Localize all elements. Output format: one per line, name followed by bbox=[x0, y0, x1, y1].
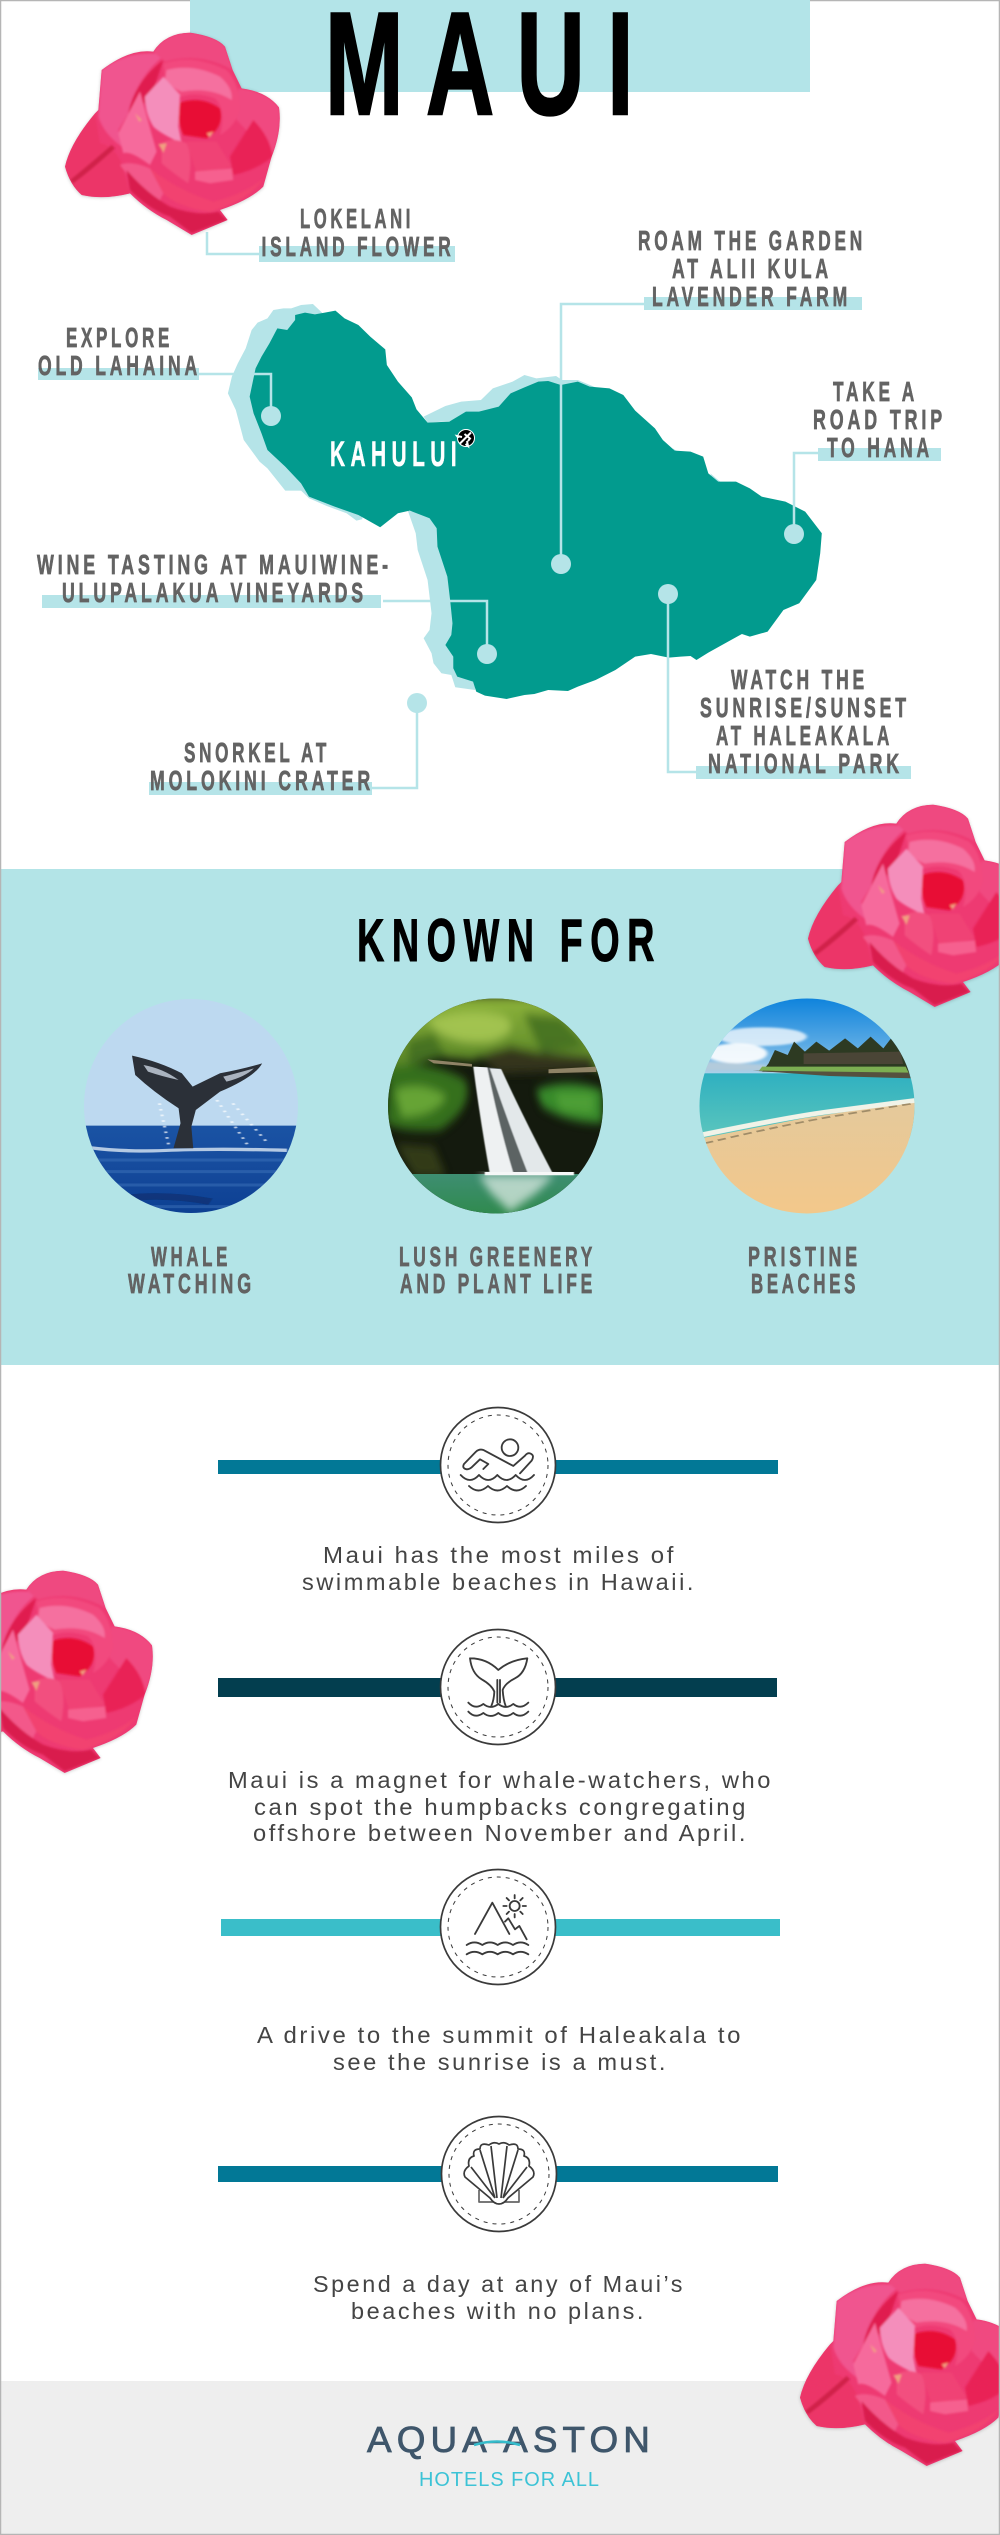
label: Lokelani Island Flower bbox=[259, 203, 455, 262]
tagline: HOTELS FOR ALL bbox=[419, 2468, 600, 2491]
label: Alii Kula Lavender Farm bbox=[638, 225, 866, 312]
caption: whale watching: WATCHING bbox=[128, 1268, 255, 1299]
label: Alii Kula Lavender Farm: ROAM THE GARDEN bbox=[638, 225, 866, 256]
bar bbox=[221, 1919, 780, 1936]
label: Road trip to Hana bbox=[813, 376, 946, 463]
bar bbox=[218, 2166, 778, 2182]
label: Haleakala bbox=[696, 664, 911, 779]
photo: waterfall bbox=[383, 997, 612, 1217]
caption: lush greenery bbox=[399, 1241, 596, 1299]
caption: lush greenery: LUSH GREENERY bbox=[399, 1241, 596, 1272]
text: swimmable beaches in Hawaii. bbox=[302, 1569, 696, 1595]
text: Spend a day at any of Maui’s bbox=[313, 2271, 685, 2297]
text bbox=[257, 2022, 743, 2075]
label: Wine tasting: WINE TASTING AT MAUIWINE- bbox=[37, 549, 392, 580]
label: Wine tasting: ULUPALAKUA VINEYARDS bbox=[62, 577, 367, 608]
label: Lokelani Island Flower: ISLAND FLOWER bbox=[262, 231, 454, 262]
caption: pristine beaches bbox=[748, 1241, 861, 1299]
text: Maui has the most miles of bbox=[323, 1542, 676, 1568]
icon: whale tail bbox=[440, 1630, 556, 1744]
label: Old Lahaina: OLD LAHAINA bbox=[38, 350, 201, 381]
label: Alii Kula Lavender Farm: AT ALII KULA bbox=[672, 253, 832, 284]
map: island shape bbox=[250, 311, 822, 699]
photo: beach bbox=[695, 997, 918, 1217]
label: Old Lahaina: EXPLORE bbox=[66, 322, 173, 353]
text bbox=[302, 1542, 696, 1595]
caption: pristine beaches: PRISTINE bbox=[748, 1241, 861, 1272]
label: Road trip to Hana: TAKE A bbox=[833, 376, 918, 407]
label: Wine tasting bbox=[37, 549, 392, 608]
icon: airplane bbox=[457, 430, 474, 446]
text: can spot the humpbacks congregating bbox=[254, 1794, 748, 1820]
label: Alii Kula Lavender Farm: LAVENDER FARM bbox=[652, 281, 851, 312]
icon: rose known for bbox=[803, 802, 1000, 1012]
fact 3: Haleakala summit bbox=[221, 1870, 780, 2075]
icon: rose left bbox=[0, 1568, 160, 1778]
icon: rose top left bbox=[60, 30, 287, 240]
island map bbox=[228, 304, 822, 699]
text: beaches with no plans. bbox=[351, 2298, 646, 2324]
icon: mountain and sun bbox=[440, 1870, 556, 1984]
photo: whale tail bbox=[77, 997, 306, 1216]
leader lines and location dots bbox=[199, 232, 820, 788]
fact 1: swimmable beaches bbox=[218, 1408, 778, 1595]
text bbox=[313, 2271, 685, 2324]
label: Molokini Crater: MOLOKINI CRATER bbox=[150, 765, 374, 796]
title band bbox=[190, 0, 810, 92]
label: Molokini Crater: SNORKEL AT bbox=[184, 737, 330, 768]
bar bbox=[218, 1460, 778, 1474]
map: coastline shadow bbox=[228, 304, 731, 690]
footer background bbox=[0, 2381, 1000, 2535]
fact 4: beaches with no plans bbox=[218, 2116, 778, 2324]
heading: known for: KNOWN FOR bbox=[357, 907, 662, 974]
logo: Aqua Aston: AQUA ASTON bbox=[367, 2419, 655, 2460]
text: A drive to the summit of Haleakala to bbox=[257, 2022, 743, 2048]
label: Road trip to Hana: TO HANA bbox=[827, 432, 933, 463]
map label: Kahului: KAHULUI bbox=[330, 435, 462, 474]
label: Molokini Crater bbox=[149, 737, 374, 796]
icon: rose bottom right bbox=[795, 2261, 1000, 2471]
caption: pristine beaches: BEACHES bbox=[751, 1268, 859, 1299]
icon: seashell bbox=[442, 2116, 556, 2232]
bar bbox=[218, 1678, 777, 1697]
label: Lokelani Island Flower: LOKELANI bbox=[300, 203, 414, 234]
panel: known for bbox=[0, 869, 1000, 1365]
label: Haleakala: WATCH THE bbox=[731, 664, 868, 695]
caption: lush greenery: AND PLANT LIFE bbox=[400, 1268, 596, 1299]
label: Haleakala: AT HALEAKALA bbox=[716, 720, 893, 751]
icon: swimmer bbox=[440, 1408, 556, 1522]
text bbox=[228, 1767, 773, 1846]
text: Maui is a magnet for whale-watchers, who bbox=[228, 1767, 773, 1793]
text: see the sunrise is a must. bbox=[333, 2049, 668, 2075]
label: Old Lahaina bbox=[38, 322, 201, 381]
panel: footer bbox=[0, 2381, 1000, 2535]
known for background bbox=[0, 869, 1000, 1365]
fact 2: whale watchers bbox=[218, 1630, 777, 1846]
text: offshore between November and April. bbox=[253, 1820, 748, 1846]
caption: whale watching bbox=[128, 1241, 255, 1299]
caption: whale watching: WHALE bbox=[151, 1241, 231, 1272]
